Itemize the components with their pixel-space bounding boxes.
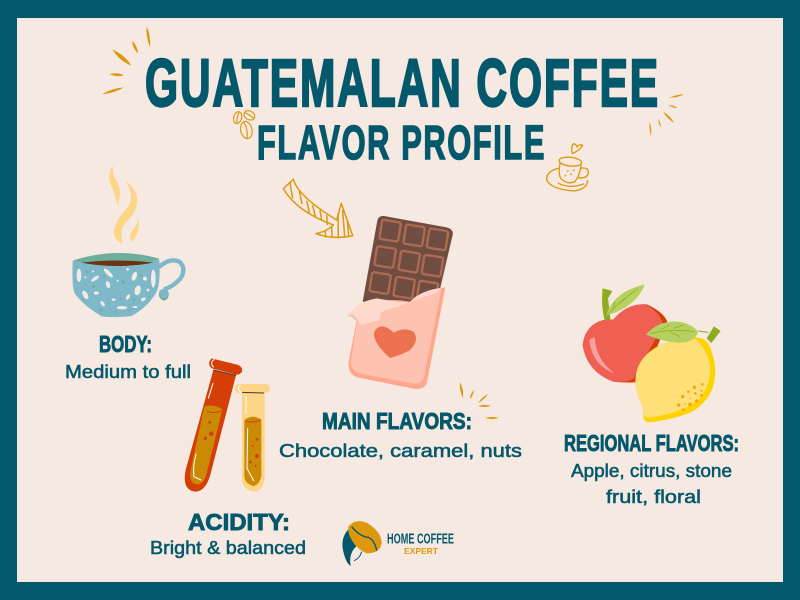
logo: home coffee expert: HOME COFFEE [387,532,454,548]
label: body [65,331,191,382]
logo: home coffee expert: EXPERT [404,546,439,556]
label: acidity: ACIDITY: [188,509,290,535]
heart [374,326,416,358]
label: regional flavors [564,430,739,507]
label: body: BODY: [99,331,152,357]
rim [73,253,159,265]
icon: apple and lemon [583,284,721,422]
wrapper [349,287,445,389]
icon: sparkle right of title [649,94,684,136]
icon: coffee beans outline [232,109,256,140]
cup pattern [77,267,156,309]
apple [583,304,667,382]
apple stem [602,288,612,321]
icon: sparkle above main flavors [460,382,499,419]
yellow tube [242,392,265,492]
red tube [185,370,236,492]
apple leaf [606,284,645,316]
chocolate squares [369,220,448,303]
label: regional flavors: fruit, floral [606,487,701,507]
icon: outlined cup and heart [547,144,588,191]
subtitle: FLAVOR PROFILE [257,117,546,170]
lemon stem and leaf [698,331,708,332]
icon: hatched arrow [283,179,353,238]
handle [159,260,183,289]
label: acidity [150,509,306,558]
steam [109,166,139,244]
label: acidity: Bright & balanced [150,538,306,558]
label: body: Medium to full [65,362,191,382]
cup body [72,259,160,317]
icon: coffee cup with steam [72,166,183,317]
lemon [635,337,715,422]
label: main flavors [279,408,522,461]
icon: chocolate bar [347,216,453,389]
icon: test tubes [185,358,270,492]
label: main flavors: MAIN FLAVORS: [322,408,472,434]
icon: sparkle left of title [102,26,150,94]
label: regional flavors: Apple, citrus, stone [571,461,732,481]
logo: home coffee expert [342,521,454,566]
label: main flavors: Chocolate, caramel, nuts [279,441,522,461]
label: regional flavors: REGIONAL FLAVORS: [564,430,739,456]
